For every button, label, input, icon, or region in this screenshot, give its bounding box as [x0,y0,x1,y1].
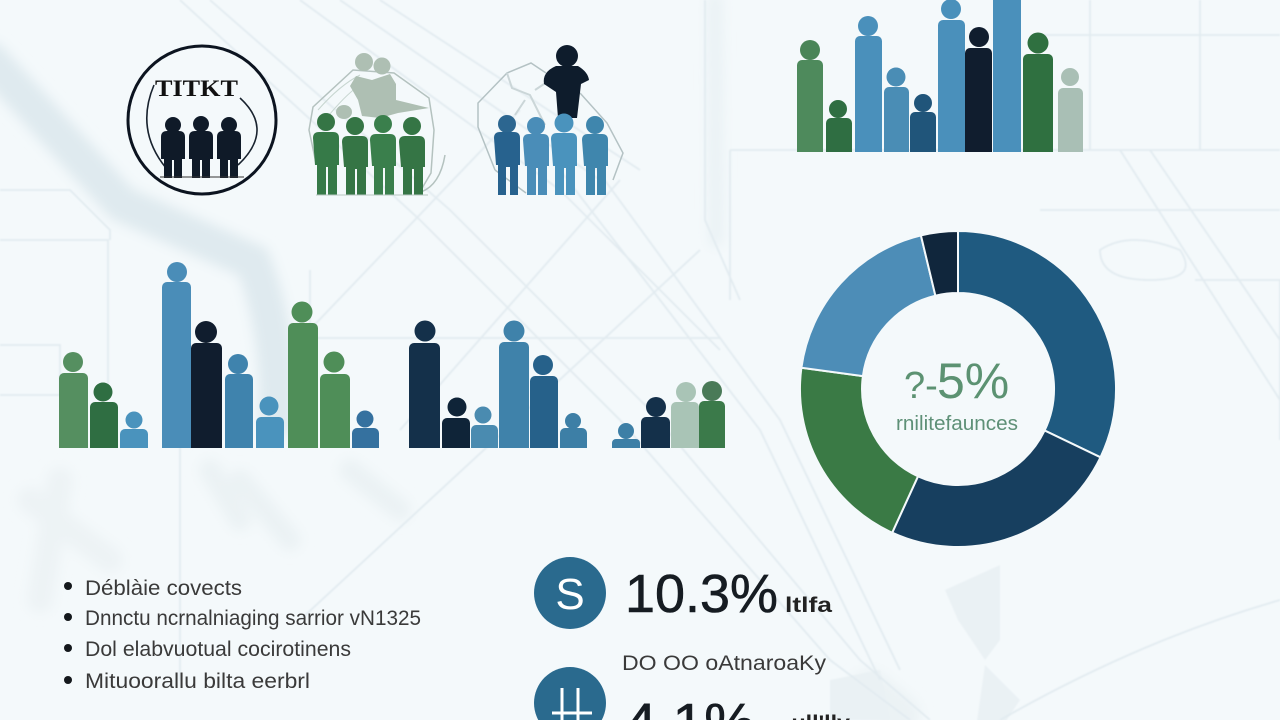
stat badge: first: S [555,570,585,619]
stat caption: DO OO oAtnaroaKy [622,652,827,675]
four green people [313,113,425,195]
donut centre value: ?- [904,365,938,407]
segment: teal blue [958,231,1116,457]
donut centre value: 5% [937,353,1009,409]
dark leader figure [544,45,589,118]
icon group: green people with globe [309,53,445,195]
four blue people [494,114,608,195]
icon group: blue people with leader [478,45,623,195]
pictogram bar chart: middle group [409,320,587,458]
stat badge: second [534,667,606,720]
stat value: 10.3%: 10.3% [625,564,778,624]
pictogram bar chart: left group [59,262,379,458]
bullet list: Dol elabvuotual cocirotinens [85,638,351,661]
segment: near black [921,231,958,296]
bullet list: Dnnctu ncrnalniaging sarrior vN1325 [85,607,421,630]
segment: navy [892,430,1100,547]
three dark people [161,116,241,178]
segment: green [800,368,918,533]
donut centre label: rnilitefaunces [896,413,1018,435]
bullet list: Déblàie covects [85,577,242,600]
bullet list [64,577,421,693]
pictogram bar chart: top right [797,0,1083,160]
stat badge: first [534,557,606,629]
pictogram bar chart: right group [612,381,725,448]
stat unit: first: ltlfa [785,594,832,617]
pale map blocks [830,565,1020,720]
bullet list: Mituoorallu bilta eerbrl [85,670,310,693]
segment: light blue [801,235,935,376]
donut chart [800,231,1116,547]
icon title text: TITKT [155,76,238,101]
pale figures [336,53,429,119]
icon group: title circle with three people [128,46,276,194]
